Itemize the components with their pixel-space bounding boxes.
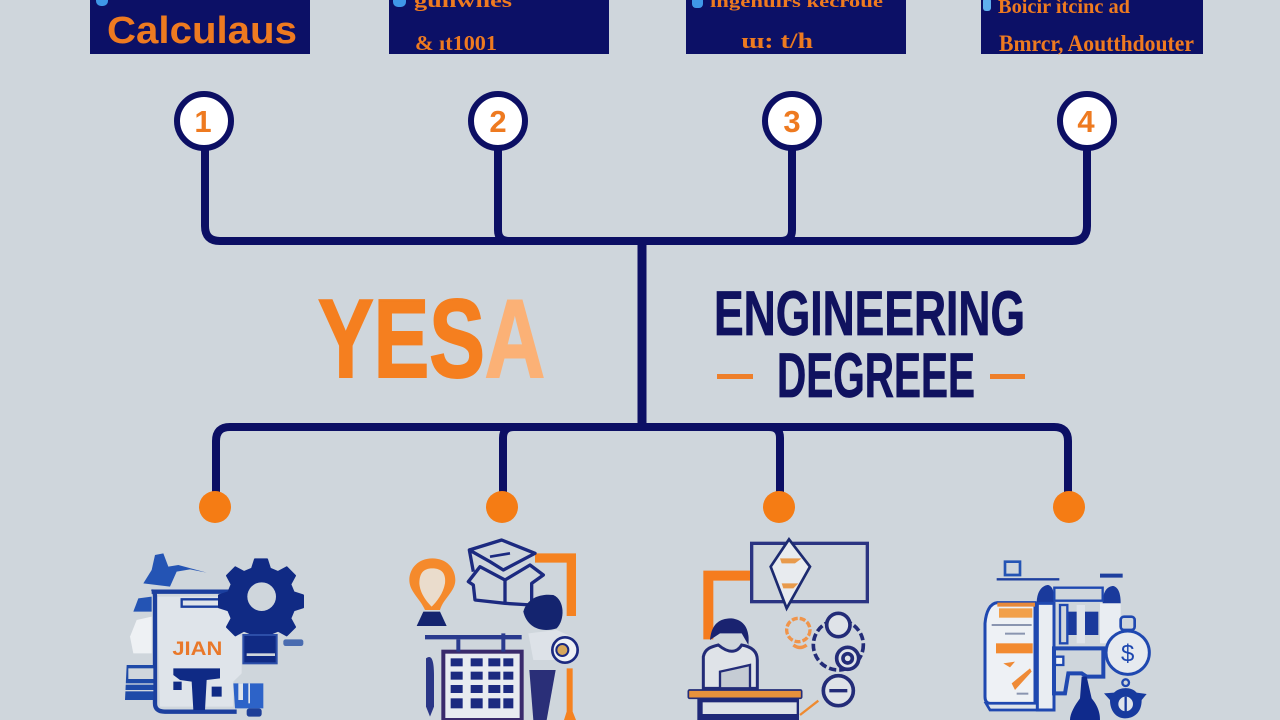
step 4 [1060, 94, 1114, 148]
icon: machine and finance: $ [1121, 641, 1134, 668]
icon: bullet 1 [96, 0, 108, 6]
step 3: 3 [783, 104, 801, 139]
icon: bullet 2 [393, 0, 406, 7]
icon: book and gear [125, 553, 303, 717]
icon: bullet 3 [692, 0, 703, 8]
text: box 2 line 2: & ıt1001 [415, 31, 497, 55]
icon: bulb, caps and calendar [409, 540, 578, 720]
orange node dots [199, 491, 1085, 523]
step 2 [471, 94, 525, 148]
heading: engineering degree: ENGINEERING [714, 279, 1025, 349]
icon: book and gear: JIAN [172, 639, 222, 660]
step 1 [177, 94, 231, 148]
panel: Calculaus [90, 0, 310, 54]
heading: engineering degree [714, 279, 1025, 411]
step 3 [765, 94, 819, 148]
panel: box 2 [389, 0, 609, 55]
panel: box 3 [686, 0, 906, 54]
text: box 3 line 2: ɯ: t/h [741, 28, 813, 53]
panel: box 4 [981, 0, 1203, 56]
heading: engineering degree: DEGREEE [777, 341, 975, 411]
step 2: 2 [489, 104, 507, 139]
step 1: 1 [194, 104, 212, 139]
icon: bullet 4 [983, 0, 991, 11]
heading: YESA: YESA [318, 277, 545, 401]
icon: machine and finance [985, 562, 1149, 720]
connector lines [205, 148, 1087, 495]
step 4: 4 [1077, 104, 1095, 139]
text: box 4 line 2: Bmrcr, Aoutthdouter [999, 31, 1194, 56]
heading: Calculaus: Calculaus [107, 10, 297, 52]
icon: reader with gears [688, 539, 867, 720]
